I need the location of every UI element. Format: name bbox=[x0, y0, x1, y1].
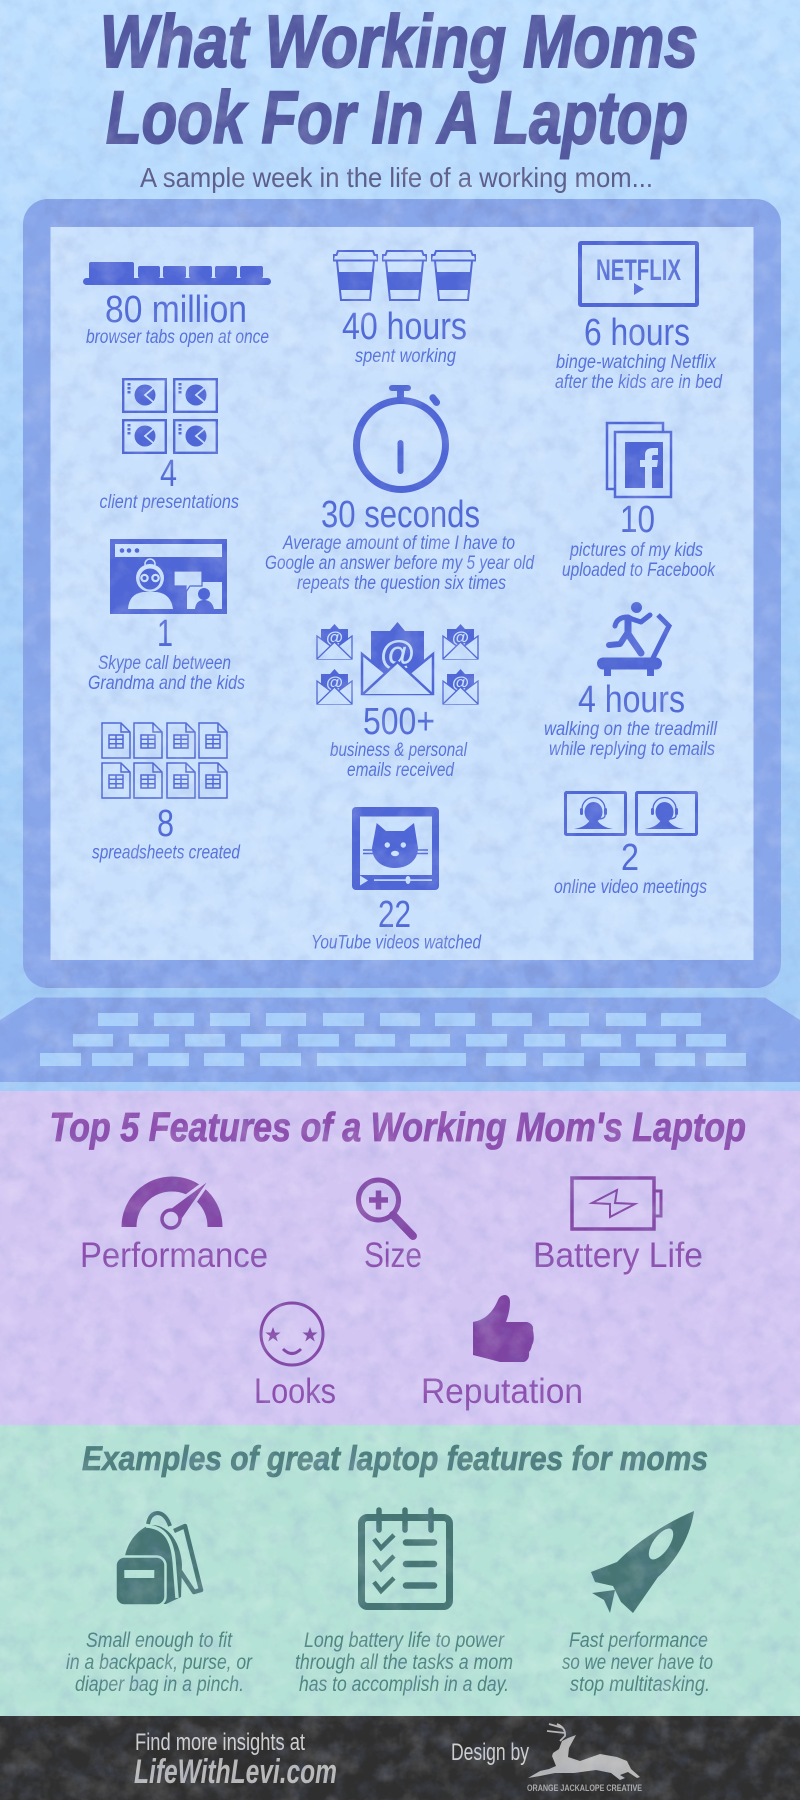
icon: coffee cups bbox=[333, 251, 476, 300]
laptop keyboard bbox=[0, 998, 800, 1091]
icon: small envelope top right: @ bbox=[452, 628, 469, 647]
logo: jackalope bbox=[528, 1735, 640, 1780]
caption: pictures of my kids bbox=[569, 540, 703, 561]
panel: laptop screen bbox=[50, 227, 754, 960]
design credit: Design by bbox=[451, 1739, 529, 1766]
icon: small envelope bottom left bbox=[317, 669, 352, 704]
icon: battery bbox=[572, 1178, 661, 1229]
caption: YouTube videos watched bbox=[311, 932, 482, 954]
caption: emails received bbox=[347, 760, 455, 781]
caption: Grandma and the kids bbox=[88, 673, 245, 694]
number: 8 bbox=[157, 803, 174, 845]
caption: binge-watching Netflix bbox=[556, 352, 717, 373]
caption: Fast performance bbox=[569, 1629, 708, 1652]
stat: client presentations bbox=[100, 379, 239, 513]
icon: small envelope bottom right bbox=[443, 669, 478, 704]
example: backpack bbox=[66, 1513, 253, 1696]
caption: Google an answer before my 5 year old bbox=[265, 553, 535, 574]
lid texture top bbox=[45, 199, 759, 227]
link text bbox=[134, 1729, 337, 1791]
icon: stopwatch bbox=[356, 385, 446, 490]
icon: spreadsheet documents bbox=[102, 723, 227, 798]
icon: large envelope: @ bbox=[380, 634, 415, 673]
caption: spent working bbox=[355, 346, 456, 367]
caption: Average amount of time I have to bbox=[282, 533, 515, 554]
icon: checklist bbox=[362, 1510, 450, 1606]
caption: in a backpack, purse, or bbox=[66, 1651, 253, 1674]
footer bbox=[0, 1716, 800, 1800]
caption: spreadsheets created bbox=[92, 842, 241, 864]
number: 30 seconds bbox=[321, 494, 480, 536]
icon: browser tabs bbox=[83, 262, 271, 285]
number: 4 hours bbox=[578, 679, 685, 721]
panel: examples bbox=[0, 1425, 800, 1716]
caption: Skype call between bbox=[98, 653, 231, 674]
number: 10 bbox=[620, 499, 655, 541]
label: Reputation bbox=[421, 1372, 583, 1411]
number: 1 bbox=[157, 613, 173, 655]
panel: top 5 features bbox=[0, 1091, 800, 1426]
stat: spreadsheets bbox=[92, 723, 241, 864]
stat: video meetings bbox=[554, 792, 707, 898]
icon: gauge bbox=[129, 1176, 215, 1228]
icon: headset video tiles bbox=[566, 792, 696, 834]
feature: reputation bbox=[421, 1295, 583, 1411]
icon: magnifier bbox=[358, 1180, 413, 1236]
caption: client presentations bbox=[100, 492, 239, 513]
icon: rocket bbox=[591, 1511, 694, 1613]
stat: facebook pictures bbox=[562, 423, 716, 581]
caption: repeats the question six times bbox=[297, 573, 506, 594]
icon: netflix screen: NETFLIX bbox=[596, 254, 681, 287]
caption: has to accomplish in a day. bbox=[299, 1673, 509, 1696]
icon: large envelope bbox=[362, 622, 433, 694]
number: 2 bbox=[621, 837, 639, 879]
icon: envelopes bbox=[317, 622, 478, 704]
caption: online video meetings bbox=[554, 877, 707, 898]
stat: treadmill bbox=[544, 602, 718, 760]
stat: hours working bbox=[333, 251, 476, 367]
icon: cat video bbox=[352, 807, 439, 890]
icon: small envelope top right bbox=[443, 624, 478, 659]
caption: walking on the treadmill bbox=[544, 719, 718, 740]
link text: Find more insights at bbox=[135, 1729, 305, 1756]
background: blue desk bbox=[0, 0, 800, 1092]
logo: antlers bbox=[547, 1724, 565, 1741]
stat: browser tabs bbox=[83, 262, 271, 348]
example: checklist bbox=[295, 1510, 513, 1696]
icon: thumbs up bbox=[473, 1295, 534, 1362]
feature: battery life bbox=[533, 1178, 703, 1275]
example: rocket bbox=[562, 1511, 713, 1696]
feature: performance bbox=[80, 1176, 268, 1275]
caption: after the kids are in bed bbox=[555, 372, 723, 393]
link text: LifeWithLevi.com bbox=[134, 1753, 337, 1791]
lid texture bottom bbox=[45, 960, 759, 988]
icon: small envelope top left bbox=[317, 624, 352, 659]
caption: uploaded to Facebook bbox=[562, 560, 716, 581]
caption: business & personal bbox=[330, 740, 468, 761]
icon: video call with grandma bbox=[110, 539, 227, 614]
icon: smiley face with star eyes bbox=[261, 1303, 323, 1365]
number: 500+ bbox=[363, 701, 435, 743]
icon: four presentation slides bbox=[123, 379, 217, 453]
caption: Small enough to fit bbox=[86, 1629, 233, 1652]
caption: Long battery life to power bbox=[304, 1629, 505, 1652]
stat: youtube bbox=[311, 807, 482, 954]
stat: thirty seconds bbox=[265, 385, 535, 594]
caption: diaper bag in a pinch. bbox=[75, 1673, 244, 1696]
heading: Examples of great laptop features for moms bbox=[82, 1440, 708, 1478]
subtitle: A sample week in the life of a working mom... bbox=[140, 162, 653, 193]
icon: backpack bbox=[116, 1513, 201, 1606]
icon: small envelope top left: @ bbox=[326, 628, 343, 647]
laptop lid bbox=[23, 199, 781, 988]
number: 4 bbox=[160, 453, 177, 495]
label: Size bbox=[364, 1236, 422, 1275]
label: Performance bbox=[80, 1236, 268, 1275]
caption: so we never have to bbox=[562, 1651, 713, 1674]
number: 40 hours bbox=[342, 306, 467, 348]
icon: small envelope bottom left: @ bbox=[326, 673, 343, 692]
feature: looks bbox=[254, 1303, 336, 1411]
stat: netflix bbox=[555, 243, 723, 393]
label: Looks bbox=[254, 1372, 336, 1411]
caption: through all the tasks a mom bbox=[295, 1651, 513, 1674]
icon: runner on treadmill bbox=[597, 602, 669, 676]
caption: while replying to emails bbox=[549, 739, 715, 760]
caption: stop multitasking. bbox=[570, 1673, 710, 1696]
logo text: ORANGE JACKALOPE CREATIVE bbox=[527, 1783, 642, 1793]
number: 22 bbox=[378, 894, 411, 936]
number: 80 million bbox=[105, 289, 247, 331]
caption: browser tabs open at once bbox=[86, 327, 269, 348]
title bbox=[100, 0, 698, 159]
number: 6 hours bbox=[584, 312, 690, 354]
feature: size bbox=[358, 1180, 422, 1275]
stat: skype call bbox=[88, 539, 245, 694]
label: Battery Life bbox=[533, 1236, 703, 1275]
icon: facebook photos bbox=[607, 423, 671, 497]
stat: emails bbox=[317, 622, 478, 781]
icon: small envelope bottom right: @ bbox=[452, 673, 469, 692]
icon: netflix screen bbox=[580, 243, 697, 305]
